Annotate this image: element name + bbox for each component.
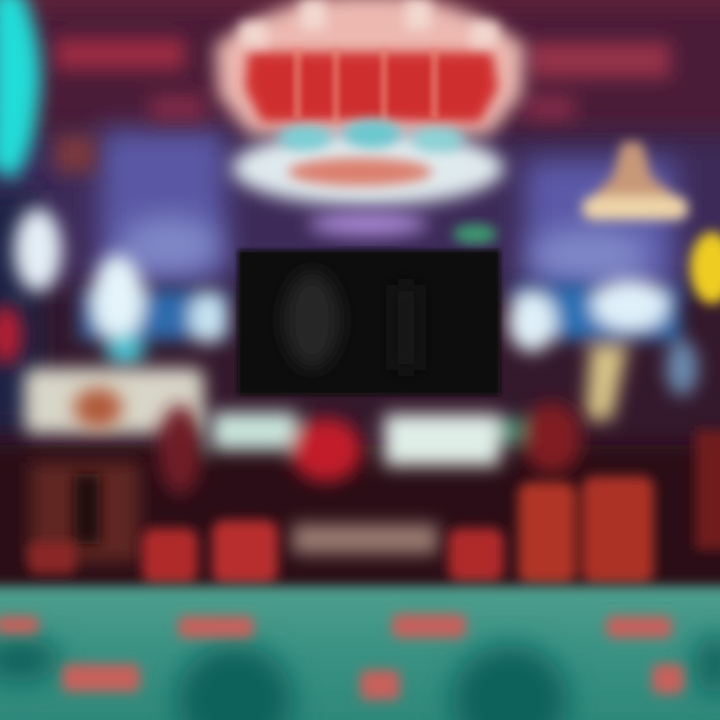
crown sign bbox=[215, 0, 525, 135]
oval sign bbox=[232, 120, 504, 244]
red wall stripes bbox=[0, 0, 720, 173]
centre table bbox=[158, 402, 582, 554]
lamp right bbox=[582, 142, 690, 220]
green felt table bbox=[0, 586, 720, 720]
yellow accent right bbox=[690, 232, 720, 304]
left table bbox=[24, 368, 204, 562]
red chip stacks bbox=[28, 430, 720, 584]
white and blue left shapes bbox=[0, 208, 230, 366]
white and blue right shapes bbox=[508, 279, 698, 420]
cyan neon left bbox=[0, 0, 41, 180]
monitor bbox=[238, 250, 500, 395]
